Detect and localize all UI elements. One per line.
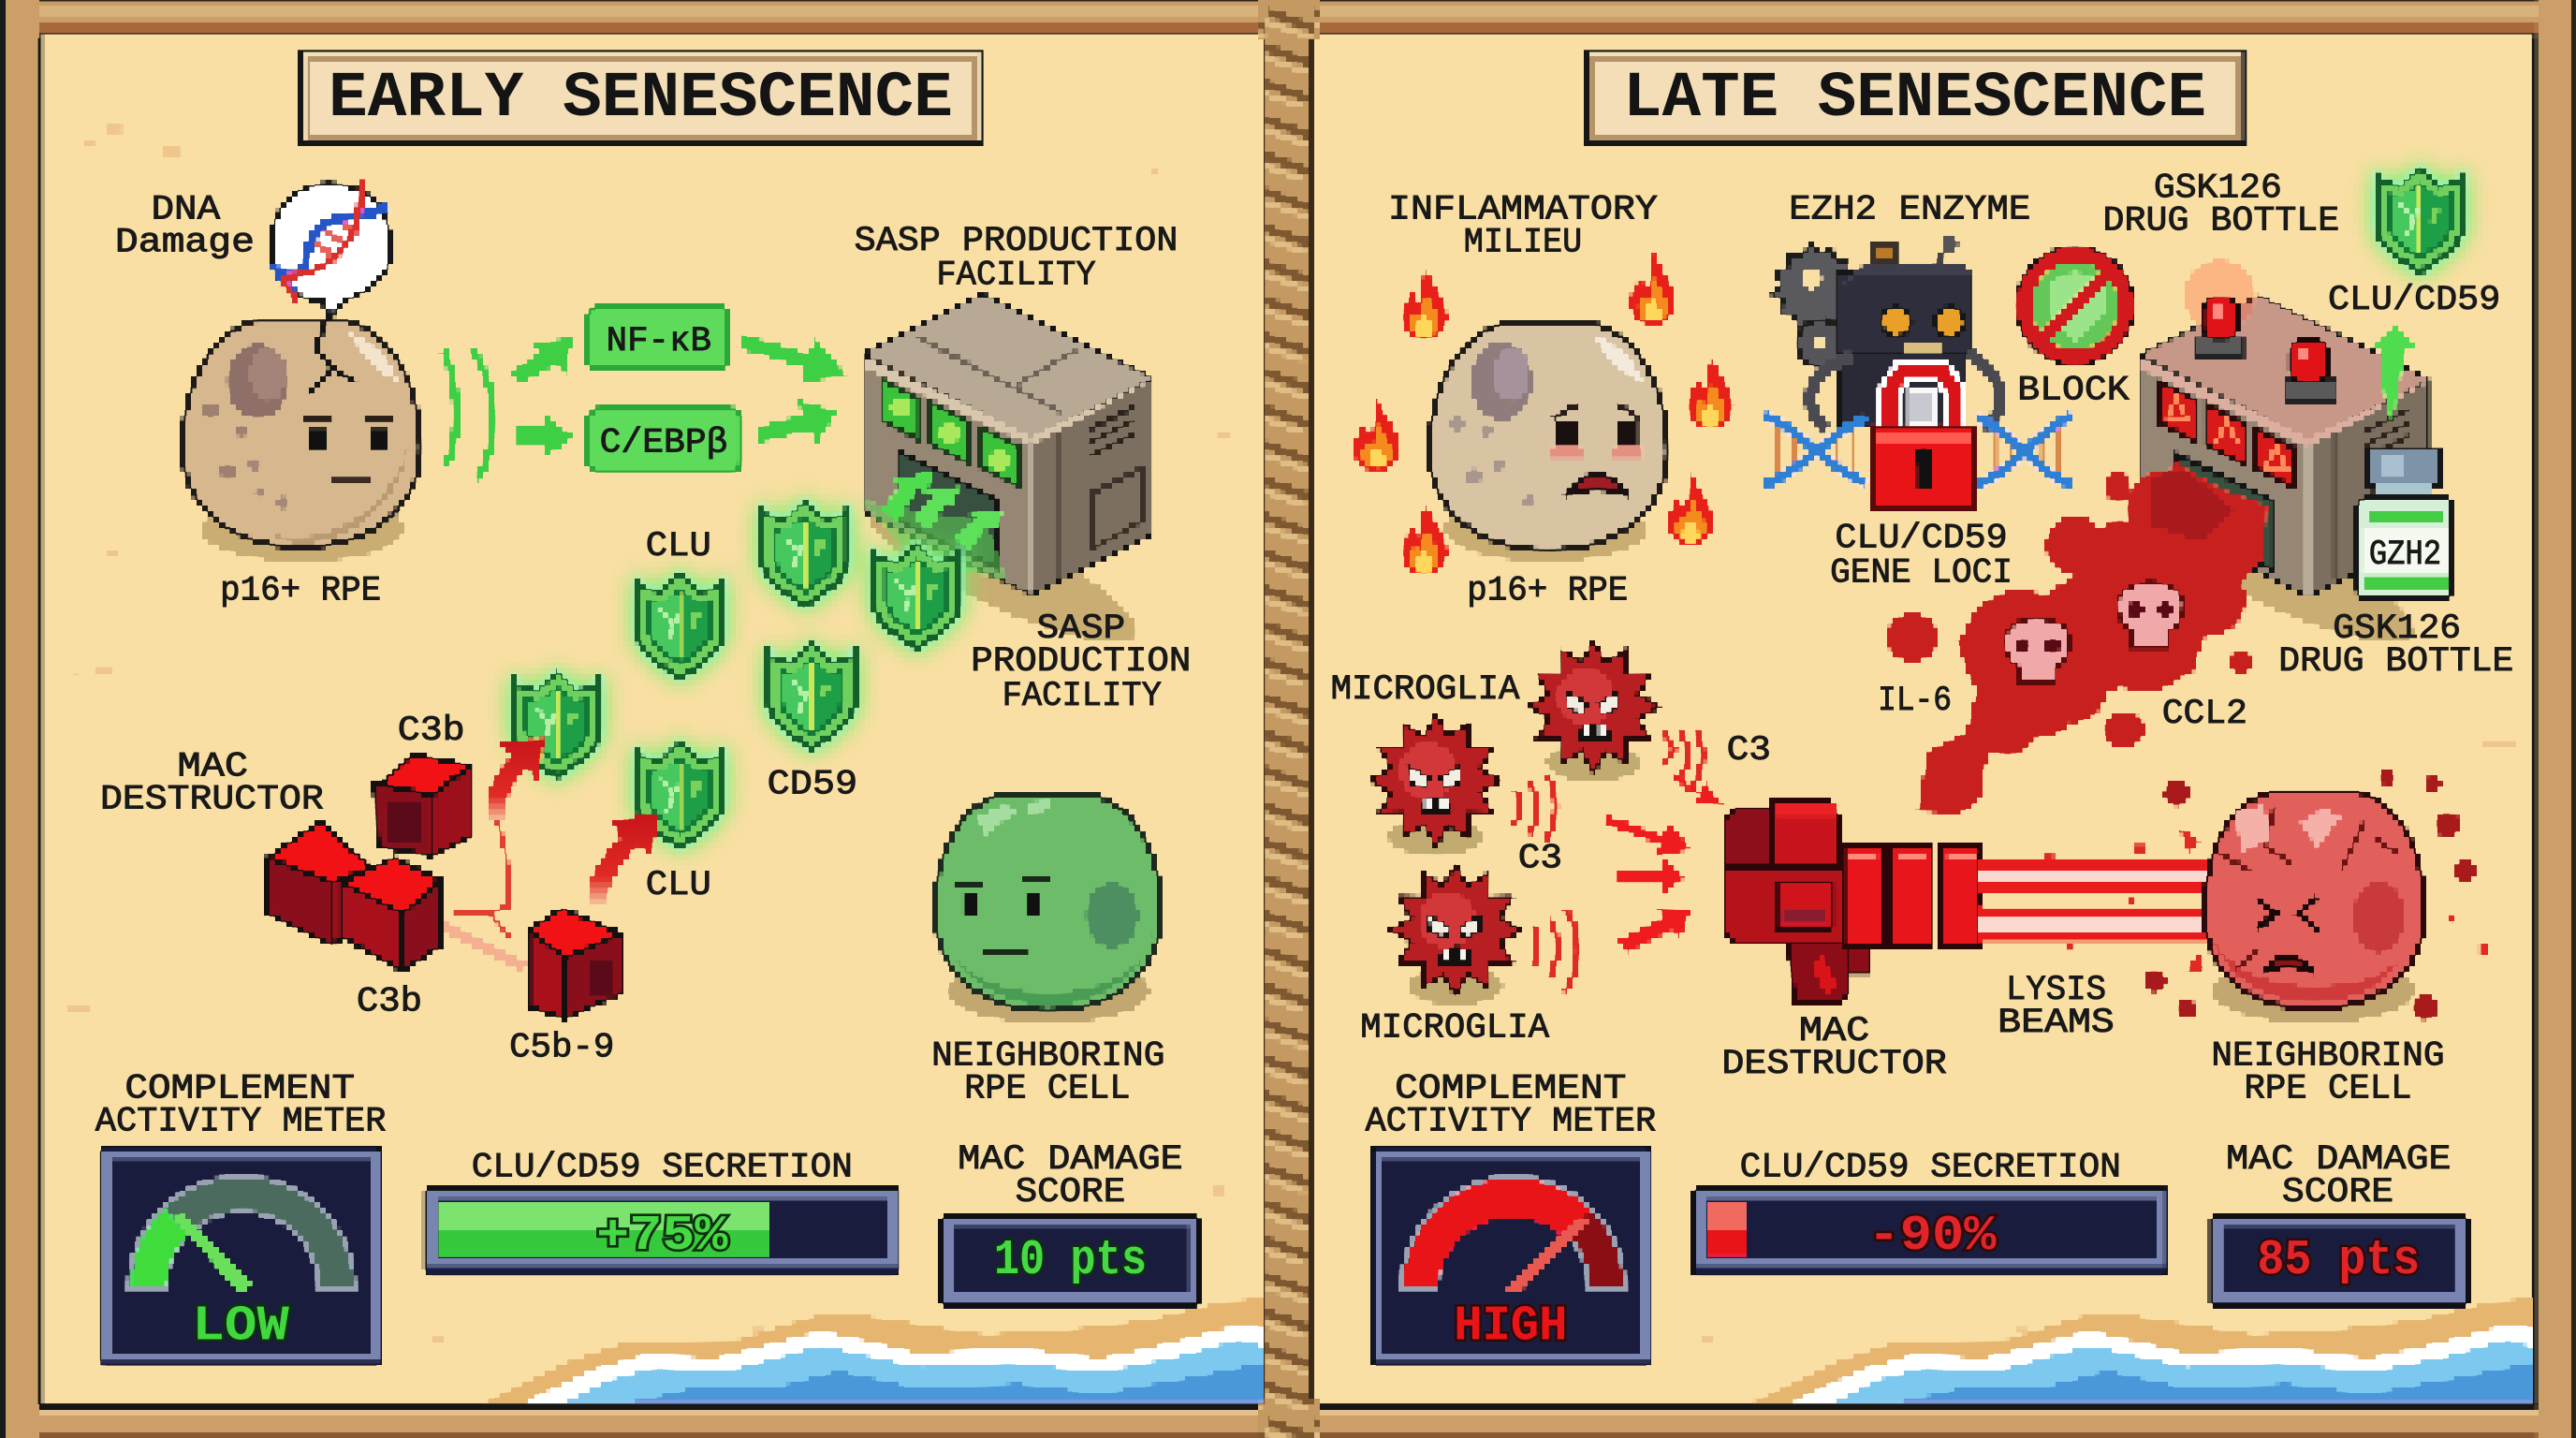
- label: MAC damage score: SCORE: [1016, 1173, 1125, 1212]
- label: GSK126 drug bottle bottom: GSK126: [2333, 609, 2461, 649]
- beach waves right: [1753, 1299, 2533, 1401]
- label: C3b bottom: C3b: [357, 982, 422, 1021]
- label: inflammatory milieu: MILIEU: [1464, 224, 1582, 263]
- icon: senescent RPE cell: [183, 318, 420, 562]
- label: GSK126 drug bottle top: [2103, 169, 2339, 242]
- label: SASP production facility top: FACILITY: [936, 257, 1096, 296]
- icons: MAC blocks: [268, 755, 622, 1019]
- label: SASP production facility bottom: [971, 609, 1191, 716]
- signal waves red: [1515, 729, 1703, 992]
- label: MAC damage score: MAC DAMAGE: [958, 1140, 1183, 1180]
- label: neighboring RPE cell late: NEIGHBORING: [2211, 1036, 2445, 1076]
- label: inflammatory milieu: INFLAMMATORY: [1388, 190, 1658, 229]
- label: GSK126 drug bottle top: DRUG BOTTLE: [2103, 202, 2339, 242]
- arrow: blocked attack upper: [488, 738, 544, 822]
- label: microglia bottom: MICROGLIA: [1360, 1008, 1550, 1048]
- label: CLU upper: CLU: [646, 527, 711, 566]
- score box: early: [942, 1216, 1199, 1306]
- label: complement activity meter: COMPLEMENT: [124, 1069, 355, 1108]
- label: MAC damage score late: SCORE: [2282, 1173, 2393, 1212]
- beach waves left: [485, 1299, 1265, 1401]
- label: complement activity meter: [95, 1069, 386, 1142]
- label: lysis beams: [1998, 971, 2115, 1043]
- label: microglia top: MICROGLIA: [1331, 670, 1520, 710]
- label: neighboring RPE cell: [931, 1036, 1164, 1108]
- icon: SASP facility late: [2130, 259, 2428, 668]
- icons: microglia: [1370, 640, 1660, 1005]
- label: GSK126 drug bottle bottom: [2278, 609, 2513, 682]
- label: CD59: CD59: [768, 766, 857, 805]
- icon: SASP facility early: [853, 296, 1151, 668]
- label: MAC destructor late: DESTRUCTOR: [1721, 1045, 1947, 1084]
- label: secretion late: CLU/CD59 SECRETION: [1740, 1149, 2121, 1188]
- label: CLU lower: CLU: [646, 866, 711, 905]
- label: lysis beams: LYSIS: [2006, 971, 2106, 1010]
- label: MAC damage score: [958, 1140, 1183, 1212]
- label: IL-6: IL-6: [1878, 682, 1952, 721]
- value: 10 pts: 10 pts: [994, 1232, 1147, 1288]
- label: SASP production facility bottom: SASP: [1036, 609, 1125, 649]
- node: NF-kB: [588, 307, 728, 370]
- gauge: complement low: [100, 1147, 381, 1365]
- bar: secretion -90%: [1694, 1188, 2167, 1275]
- arrows: complement to gun: [1603, 772, 1725, 953]
- label: MAC damage score late: MAC DAMAGE: [2226, 1140, 2452, 1180]
- label: complement activity meter: ACTIVITY METER: [95, 1103, 386, 1142]
- icons: flames: [1354, 252, 1734, 575]
- title: late senescence: LATE SENESCENCE: [1623, 62, 2206, 135]
- label: CLU/CD59: CLU/CD59: [2328, 281, 2500, 320]
- icon: distressed RPE cell: [1429, 324, 1667, 562]
- label: MAC destructor: [100, 747, 324, 820]
- icon: DNA gene loci: [1764, 416, 2071, 485]
- label: complement activity meter late: ACTIVITY METER: [1365, 1103, 1656, 1142]
- bar: secretion +75%: [426, 1188, 899, 1275]
- label: CLU/CD59 gene loci: [1830, 519, 2012, 593]
- label: p16+ RPE late: p16+ RPE: [1467, 572, 1628, 611]
- label: C3 lower: C3: [1518, 840, 1562, 879]
- title plaque: early: [302, 51, 983, 143]
- title plaque: late: [1587, 51, 2246, 143]
- complement fragment links: [439, 822, 526, 968]
- arrow: CLU/CD59 up: [2367, 324, 2420, 424]
- label: CLU/CD59 gene loci: GENE LOCI: [1830, 553, 2012, 593]
- label: C5b-9: C5b-9: [509, 1029, 614, 1068]
- label: neighboring RPE cell late: [2211, 1036, 2445, 1108]
- label: complement activity meter late: [1365, 1069, 1656, 1142]
- label: NF-kB: NF-κB: [607, 322, 711, 361]
- label: GSK126 drug bottle bottom: DRUG BOTTLE: [2278, 642, 2513, 682]
- cloud: toxic SASP with skulls: [1886, 463, 2267, 814]
- score box: late: [2211, 1216, 2467, 1306]
- arrow: blocked attack lower: [588, 814, 659, 905]
- arrow: NF-kB to facility: [742, 333, 848, 383]
- label: MAC destructor late: MAC: [1799, 1012, 1869, 1051]
- label: SASP production facility bottom: FACILITY: [1003, 677, 1162, 716]
- gauge: complement high: [1372, 1147, 1651, 1365]
- icon: CLU/CD59 shield: [2374, 165, 2466, 276]
- label: SASP production facility top: [855, 222, 1178, 296]
- icons: CLU and CD59 shields: [511, 498, 962, 851]
- title: early senescence: EARLY SENESCENCE: [329, 62, 953, 135]
- value: HIGH: HIGH: [1454, 1298, 1567, 1354]
- label: GSK126 drug bottle top: GSK126: [2154, 169, 2282, 209]
- label: DNA Damage: DNA: [151, 190, 221, 229]
- label: inflammatory milieu: [1388, 190, 1658, 263]
- value: LOW: LOW: [192, 1298, 289, 1354]
- icon: GSK126 bottle: [2358, 448, 2452, 600]
- value: -90%: -90%: [1868, 1208, 1997, 1264]
- node: C/EBPb: [588, 409, 741, 472]
- label: SASP production facility top: SASP PRODUCTION: [855, 222, 1178, 261]
- label: DNA Damage: Damage: [115, 224, 255, 263]
- arrow: C/EBPb to facility: [755, 399, 838, 446]
- arrow: to NF-kB: [509, 337, 574, 385]
- signal waves: [444, 348, 493, 479]
- icon: lysed neighboring cell: [2144, 769, 2487, 1023]
- label: EZH2 enzyme: EZH2 ENZYME: [1789, 190, 2030, 229]
- label: neighboring RPE cell late: RPE CELL: [2244, 1069, 2411, 1108]
- label: bottle text GZH2: GZH2: [2369, 536, 2441, 575]
- icon: EZH2 robot: [1773, 235, 2000, 431]
- icon: healthy neighboring cell: [935, 794, 1162, 1023]
- value: 85 pts: 85 pts: [2258, 1232, 2420, 1288]
- label: lysis beams: BEAMS: [1998, 1004, 2115, 1043]
- lysis beams: [1980, 844, 2224, 951]
- label: C/EBPb: C/EBPβ: [600, 424, 728, 463]
- label: DNA Damage: [115, 190, 255, 263]
- label: CCL2: CCL2: [2162, 695, 2247, 734]
- label: C3b top: C3b: [398, 712, 465, 751]
- label: secretion: CLU/CD59 SECRETION: [472, 1149, 853, 1188]
- label: MAC damage score late: [2226, 1140, 2452, 1212]
- icon: padlock: [1873, 372, 1975, 509]
- icon: MAC destructor gun: [1725, 800, 1980, 1003]
- label: neighboring RPE cell: RPE CELL: [964, 1069, 1131, 1108]
- value: +75%: +75%: [596, 1208, 728, 1264]
- label: C3 upper: C3: [1727, 731, 1771, 770]
- rope divider: [1257, 0, 1319, 1438]
- label: MAC destructor: MAC: [178, 747, 248, 786]
- label: p16+ RPE: p16+ RPE: [220, 572, 381, 611]
- label: MAC destructor late: [1721, 1012, 1947, 1084]
- label: neighboring RPE cell: NEIGHBORING: [931, 1036, 1164, 1076]
- icon: block sign: [2016, 246, 2134, 365]
- label: complement activity meter late: COMPLEMENT: [1395, 1069, 1627, 1108]
- label: SASP production facility bottom: PRODUCTION: [971, 642, 1191, 682]
- icon: DNA speech bubble: [271, 178, 391, 318]
- label: block: BLOCK: [2017, 371, 2130, 410]
- label: CLU/CD59 gene loci: CLU/CD59: [1835, 519, 2008, 558]
- arrow: to C/EBPb: [514, 414, 575, 459]
- label: MAC destructor: DESTRUCTOR: [100, 781, 324, 820]
